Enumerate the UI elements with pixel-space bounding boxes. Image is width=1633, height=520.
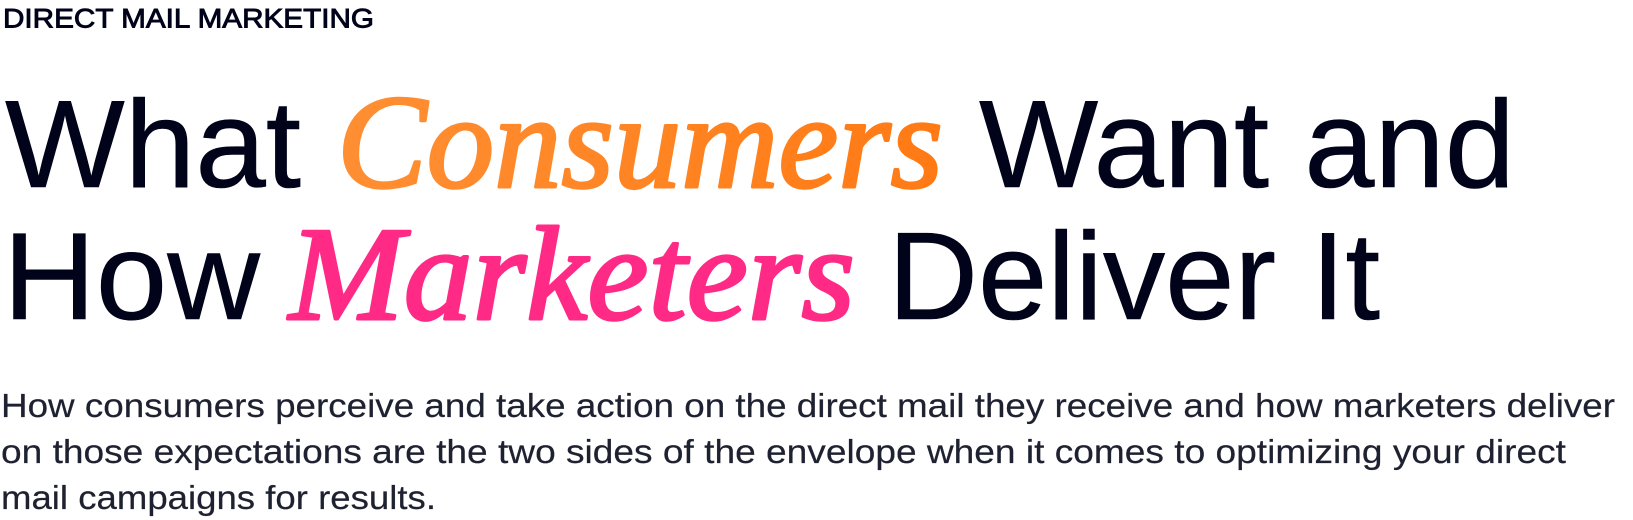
intro paragraph: mail campaigns for results. [1,479,436,516]
title line 2: Deliver It [888,208,1380,346]
title line 1 [5,68,1515,216]
highlighted word: Marketers: Marketers [287,200,855,348]
intro paragraph [1,387,1615,516]
intro paragraph: How consumers perceive and take action on the direct mail they receive and how marketers deliver [1,387,1615,424]
highlighted word: Consumers: Consumers [337,68,943,216]
title line 2 [3,200,1380,348]
title line 1: Want and [979,76,1515,214]
intro paragraph: on those expectations are the two sides of the envelope when it comes to optimizing your direct [1,433,1566,470]
kicker label: DIRECT MAIL MARKETING [3,4,374,34]
title line 1: What [5,76,301,214]
title [3,68,1515,348]
title line 2: How [3,208,260,346]
